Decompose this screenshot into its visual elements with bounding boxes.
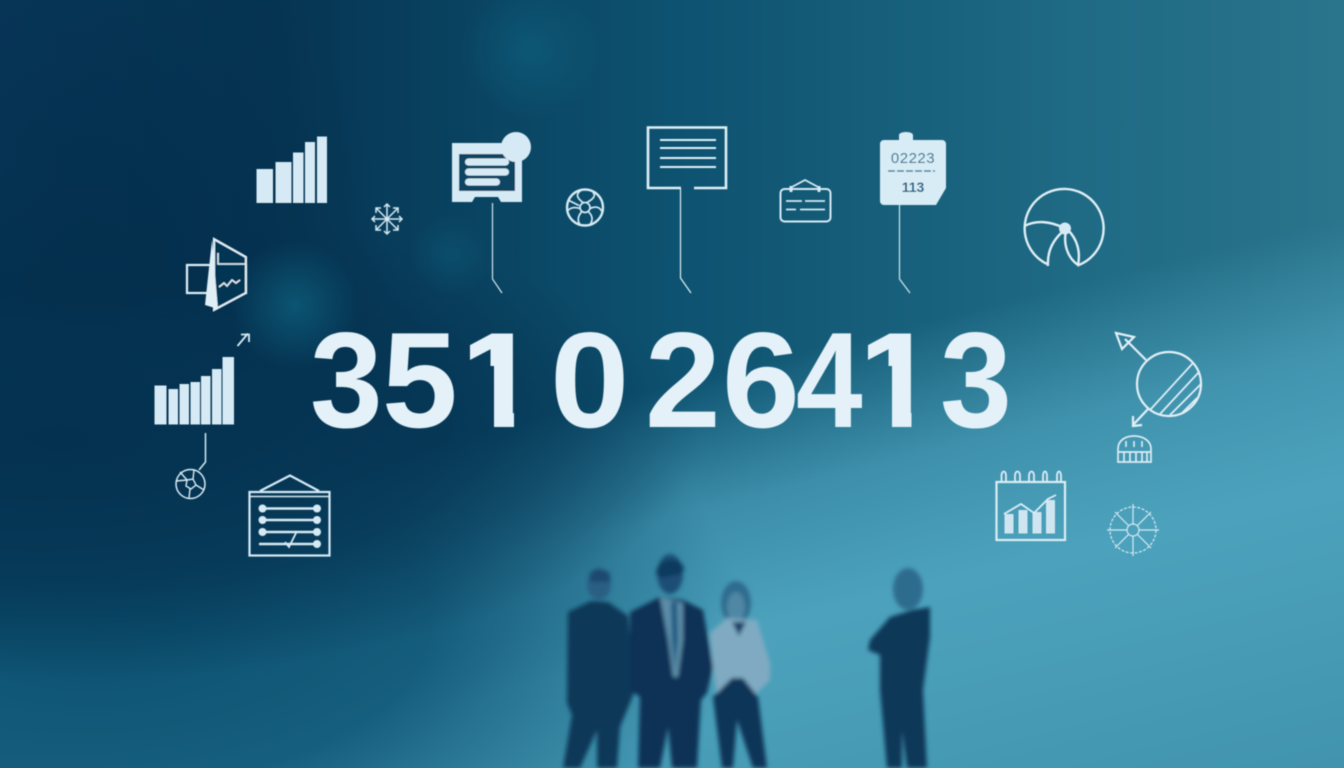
icon: globe with pin: [176, 433, 206, 498]
person: man with crossed arms: [563, 568, 635, 768]
icon: wheel: [567, 190, 603, 226]
headline number: 3: [940, 305, 1012, 457]
headline number: 4: [796, 305, 863, 457]
headline number: [312, 331, 1008, 430]
icon: text panel with pin: [648, 128, 726, 293]
person: woman with crossed arms: [868, 568, 930, 768]
headline number: 2: [645, 304, 721, 456]
headline number: 1: [850, 304, 941, 456]
icon: number tag with pin: 113: [902, 179, 925, 195]
icon: checklist board: [250, 476, 330, 556]
headline number: 3: [310, 305, 383, 457]
icon: bar chart top left: [256, 136, 327, 203]
icon: bar chart left: [154, 334, 249, 424]
icon: spoked wheel: [1107, 504, 1159, 556]
foreground artwork: [154, 125, 1203, 768]
person: woman in light blazer: [710, 581, 770, 768]
headline number: 0: [550, 304, 629, 456]
headline number: 5: [382, 304, 458, 456]
icon: calendar with growth chart: [996, 472, 1065, 540]
shirt and tie: [660, 597, 683, 677]
silhouettes: business people: [563, 554, 930, 768]
headline number: 1: [452, 304, 543, 456]
icon: calendar card: [780, 180, 830, 222]
icon: hatched circle with arrows: [1116, 333, 1201, 426]
icon: document card with circle and pin: [452, 132, 531, 293]
icon: dome gauge: [1118, 436, 1151, 462]
person: man in suit with tie: [630, 554, 713, 768]
icon: number tag with pin: 02223: [891, 150, 935, 167]
icon: pie chart circle: [1024, 189, 1104, 266]
icon: snowflake arrows: [372, 204, 402, 234]
icon: number tag with pin: [880, 132, 946, 293]
icon: presentation board with chart: [187, 239, 246, 310]
headline number: 6: [722, 305, 800, 457]
